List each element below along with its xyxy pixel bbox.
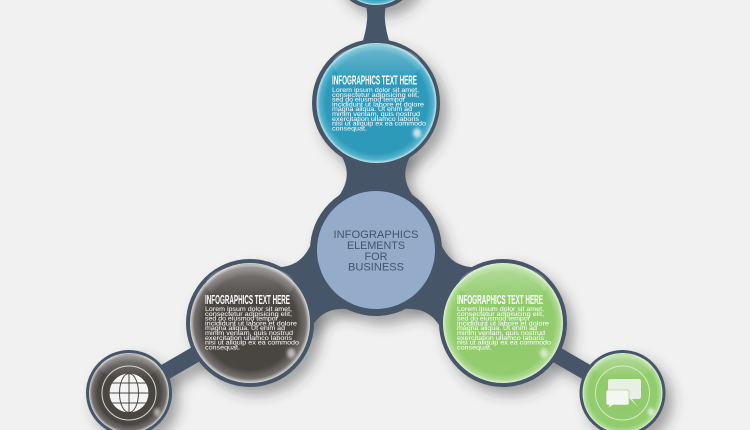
top small blue circle <box>336 0 416 5</box>
center title: BUSINESS <box>348 262 404 274</box>
body text <box>332 87 426 132</box>
body text <box>205 306 299 351</box>
body text: consequat. <box>457 344 492 351</box>
body text: minim veniam, quis nostrud <box>205 330 293 337</box>
body text: magna aliqua. Ut enim ad <box>205 325 285 332</box>
body text: Lorem ipsum dolor sit amet, <box>332 87 419 94</box>
center title: FOR <box>364 251 388 263</box>
connector network <box>86 0 666 430</box>
body text: incididunt ut labore et dolore <box>457 320 549 327</box>
body text: Lorem ipsum dolor sit amet, <box>205 306 292 313</box>
body text: sed do eiusmod tempor <box>457 316 531 323</box>
shadow of the connector network <box>93 0 672 430</box>
body text: nisi ut aliquip ex ea commodo <box>332 121 426 128</box>
panel: dark bubble: INFOGRAPHICS TEXT HERE <box>205 292 290 307</box>
center circle <box>317 191 435 309</box>
body text: nisi ut aliquip ex ea commodo <box>205 340 299 347</box>
body text: consectetur adipisicing elit, <box>332 92 419 99</box>
body text: exercitation ullamco laboris <box>205 335 293 342</box>
body text: exercitation ullamco laboris <box>457 335 545 342</box>
body text: minim veniam, quis nostrud <box>332 111 420 118</box>
body text: exercitation ullamco laboris <box>332 116 420 123</box>
center title <box>334 229 418 274</box>
panel: green bubble: INFOGRAPHICS TEXT HERE <box>457 292 543 307</box>
body text: sed do eiusmod tempor <box>332 97 406 104</box>
panel: dark bubble <box>190 263 310 383</box>
body text: sed do eiusmod tempor <box>205 316 279 323</box>
body text: Lorem ipsum dolor sit amet, <box>457 306 544 313</box>
body text: consequat. <box>205 344 240 351</box>
panel: blue bubble <box>316 43 436 163</box>
center title: INFOGRAPHICS <box>334 229 418 241</box>
body text: incididunt ut labore et dolore <box>205 320 297 327</box>
panel: blue bubble: INFOGRAPHICS TEXT HERE <box>332 72 417 88</box>
body text <box>457 306 551 351</box>
body text: nisi ut aliquip ex ea commodo <box>457 340 551 347</box>
body text: consectetur adipisicing elit, <box>205 311 292 318</box>
body text: minim veniam, quis nostrud <box>457 330 545 337</box>
icon: speech bubbles in green circle <box>582 353 662 430</box>
center title: ELEMENTS <box>347 240 405 252</box>
body text: incididunt ut labore et dolore <box>332 101 424 108</box>
body text: consectetur adipisicing elit, <box>457 311 544 318</box>
panel: green bubble <box>443 263 563 383</box>
body text: consequat. <box>332 125 367 132</box>
icon: globe in dark circle <box>89 353 169 430</box>
body text: magna aliqua. Ut enim ad <box>332 106 412 113</box>
body text: magna aliqua. Ut enim ad <box>457 325 537 332</box>
